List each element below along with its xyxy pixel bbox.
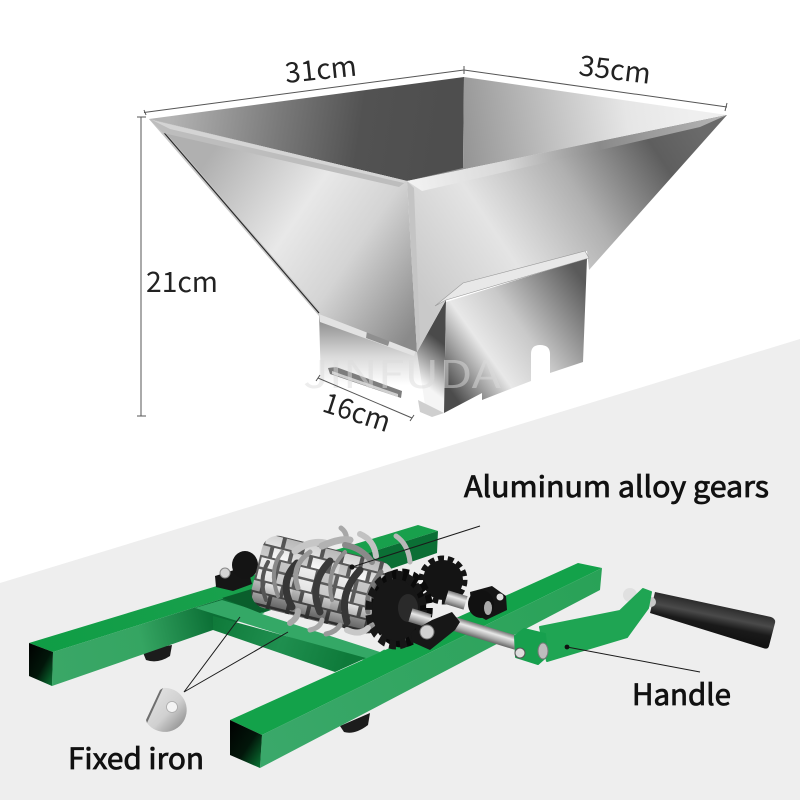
front gear depth	[375, 573, 429, 643]
drive shaft	[449, 616, 519, 650]
crank collar	[515, 629, 547, 664]
feet	[142, 645, 172, 661]
label: Handle: Handle	[632, 672, 731, 714]
hopper inner right wall	[407, 77, 727, 181]
fixed iron disc icon	[146, 688, 187, 732]
floor gap under roller	[262, 605, 400, 652]
dark inner opening	[222, 588, 280, 613]
short shaft stub	[408, 608, 432, 628]
left rail	[29, 525, 438, 652]
label: 31cm: 31cm	[283, 45, 359, 92]
machine frame	[29, 525, 602, 768]
roller body	[248, 532, 397, 637]
label: Fixed iron: Fixed iron	[68, 736, 204, 778]
crank arm	[540, 589, 651, 661]
hopper spout	[319, 300, 446, 420]
crank pin and nut	[623, 588, 637, 602]
hopper left rim	[149, 119, 407, 187]
hopper front plate	[435, 251, 589, 413]
rear gear	[422, 559, 464, 601]
label: 35cm: 35cm	[577, 44, 653, 93]
hopper	[149, 77, 727, 420]
front bearing	[411, 612, 460, 650]
hopper right rim	[407, 115, 727, 191]
blades wrapping the roller	[262, 540, 381, 634]
rear bearing	[470, 586, 507, 620]
grip	[650, 592, 775, 649]
hopper inner left wall	[149, 77, 464, 181]
dimension lines	[137, 66, 727, 421]
crank handle	[515, 588, 775, 664]
label: 21cm: 21cm	[146, 261, 218, 301]
roller with blades	[215, 528, 410, 637]
cross bar	[195, 600, 392, 662]
gears	[369, 559, 519, 650]
hopper right front face	[407, 115, 727, 352]
rear fins above roller	[341, 528, 410, 562]
hopper left front face	[149, 119, 417, 352]
gray floor panel	[0, 339, 800, 800]
front gear	[369, 575, 423, 645]
watermark: JINFUDA	[303, 344, 501, 399]
leader lines	[184, 526, 700, 692]
rear shaft	[444, 590, 468, 610]
left bearing	[215, 566, 252, 591]
right rail	[230, 563, 602, 735]
heading: Aluminum alloy gears: Aluminum alloy gears	[464, 464, 769, 506]
label: 16cm: 16cm	[318, 382, 396, 441]
